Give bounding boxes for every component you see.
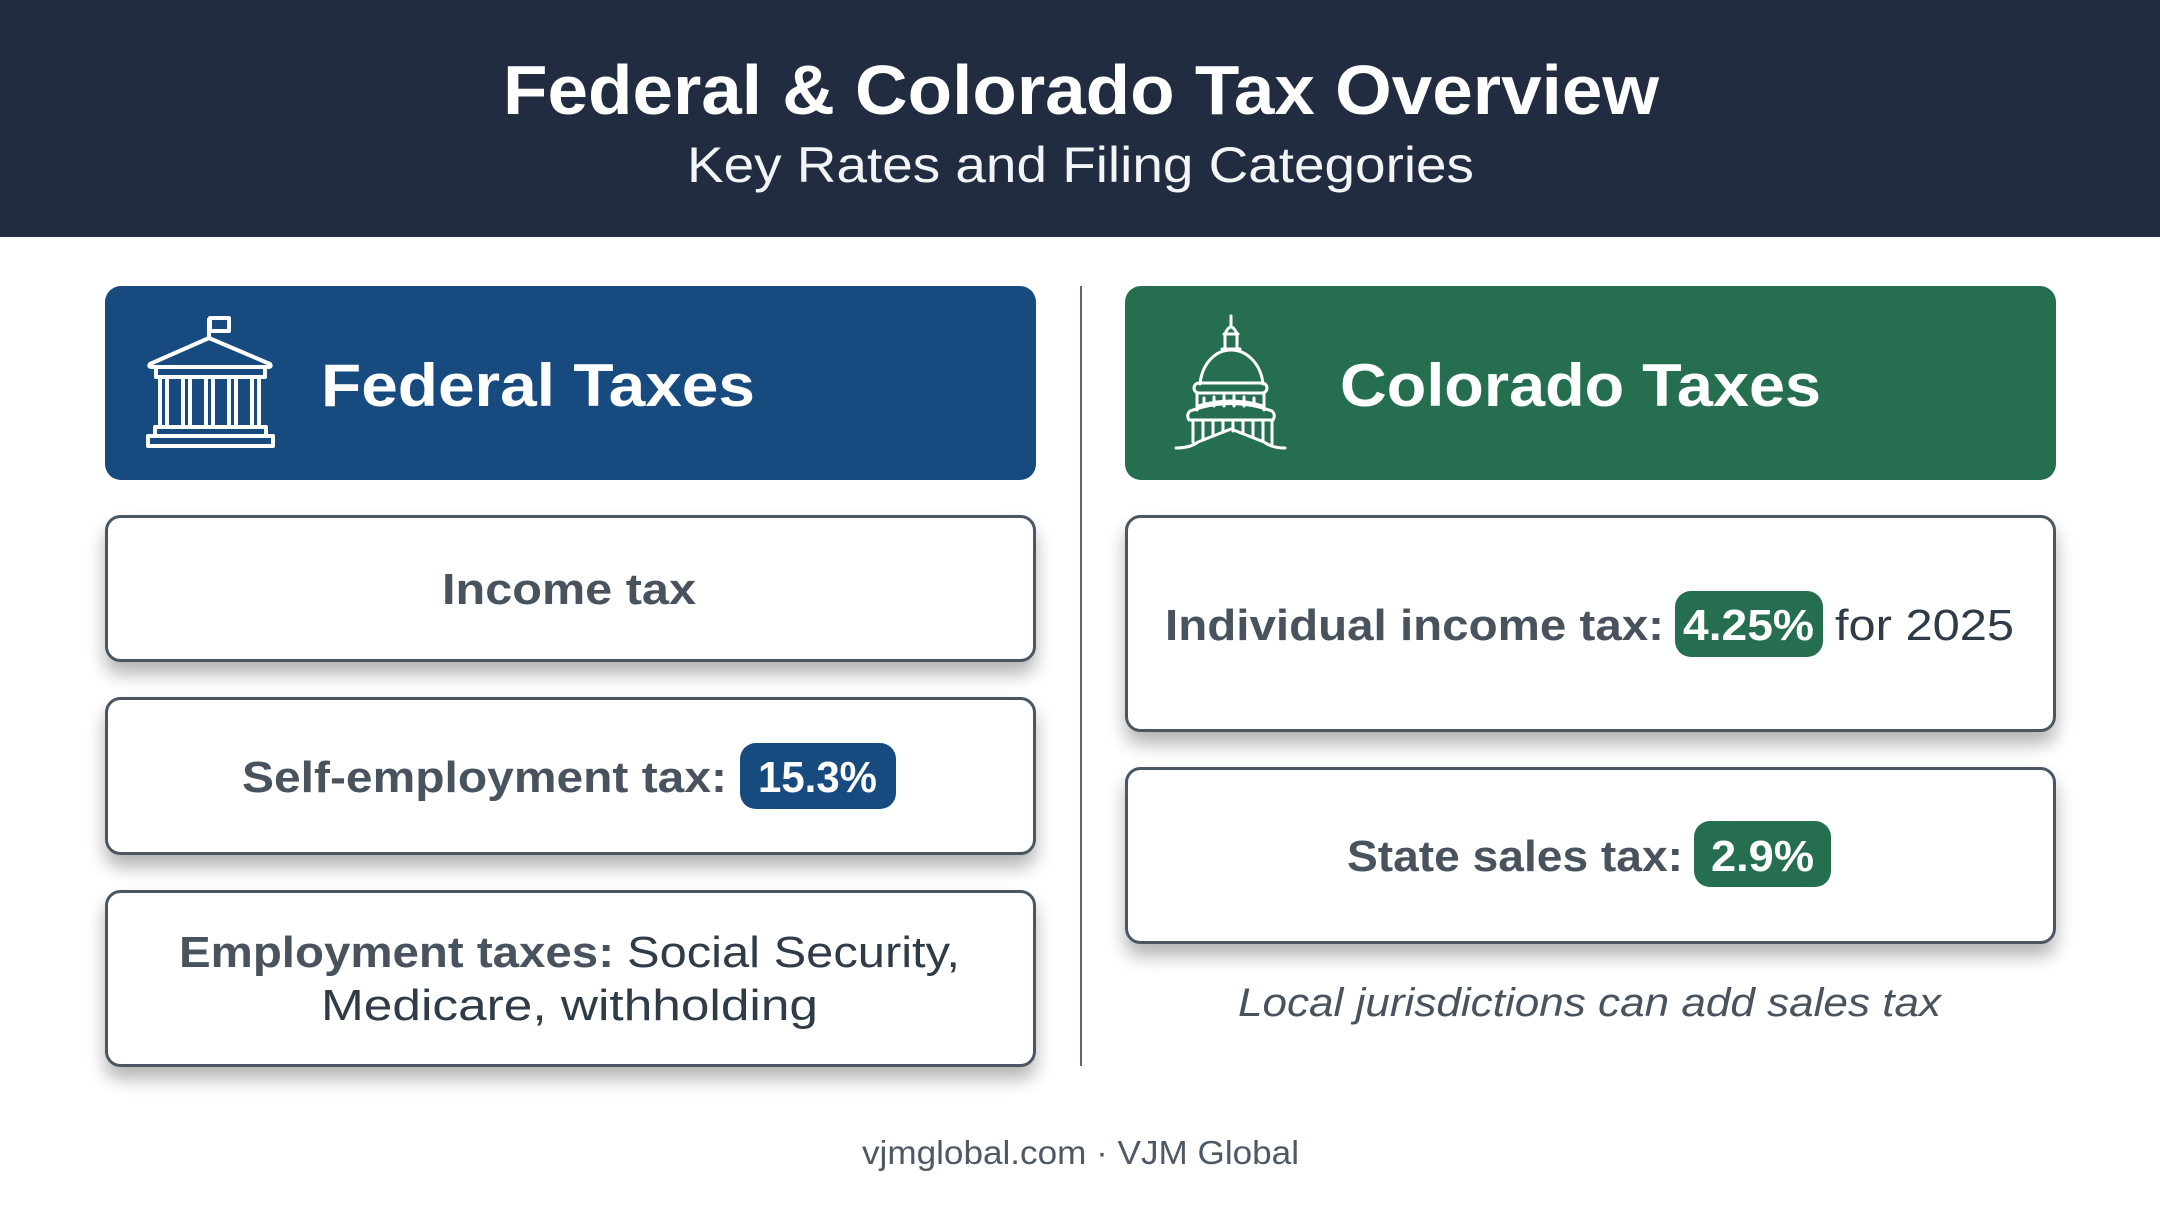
card: employment taxes: Social Security,: [627, 928, 960, 977]
note: local jurisdictions: Local jurisdictions can add sales tax: [1238, 981, 1943, 1025]
panel: federal taxes: [105, 286, 1036, 1066]
header band: [0, 0, 2160, 237]
badge: 4.25%: [1675, 591, 1823, 657]
colorado heading banner: [1125, 286, 2056, 480]
card: income tax: Income tax: [442, 565, 697, 614]
badge: 2.9%: 2.9%: [1711, 832, 1814, 881]
center divider: [1080, 286, 1082, 1066]
subtitle: Key Rates and Filing Categories: [687, 137, 1474, 193]
card: employment taxes: [106, 892, 1034, 1066]
card: self-employment tax: [106, 698, 1034, 854]
card: employment taxes: Medicare, withholding: [321, 981, 818, 1030]
badge: 15.3%: 15.3%: [758, 753, 877, 802]
federal heading banner: [105, 286, 1036, 480]
card: state sales tax: [1126, 768, 2054, 942]
badge: 2.9%: [1694, 821, 1831, 887]
card: individual income tax: Individual income tax:: [1165, 601, 1664, 650]
badge: 4.25%: 4.25%: [1683, 601, 1814, 650]
badge: 15.3%: [740, 743, 896, 809]
federal heading text: Federal Taxes: [321, 352, 755, 419]
card: income tax: [106, 516, 1034, 660]
card: individual income tax: for 2025: [1835, 601, 2014, 650]
title: Federal & Colorado Tax Overview: [503, 51, 1660, 129]
card: self-employment tax: Self-employment tax:: [242, 753, 727, 802]
panel: colorado taxes: [1125, 286, 2056, 1025]
card: state sales tax: State sales tax:: [1347, 832, 1683, 881]
icon: capitol dome: [1176, 316, 1285, 448]
icon: government building with flag: [148, 318, 273, 446]
colorado heading text: Colorado Taxes: [1340, 352, 1821, 419]
card: employment taxes: Employment taxes:: [179, 928, 614, 977]
footer source: vjmglobal.com · VJM Global: [862, 1134, 1299, 1171]
card: individual income tax: [1126, 516, 2054, 730]
